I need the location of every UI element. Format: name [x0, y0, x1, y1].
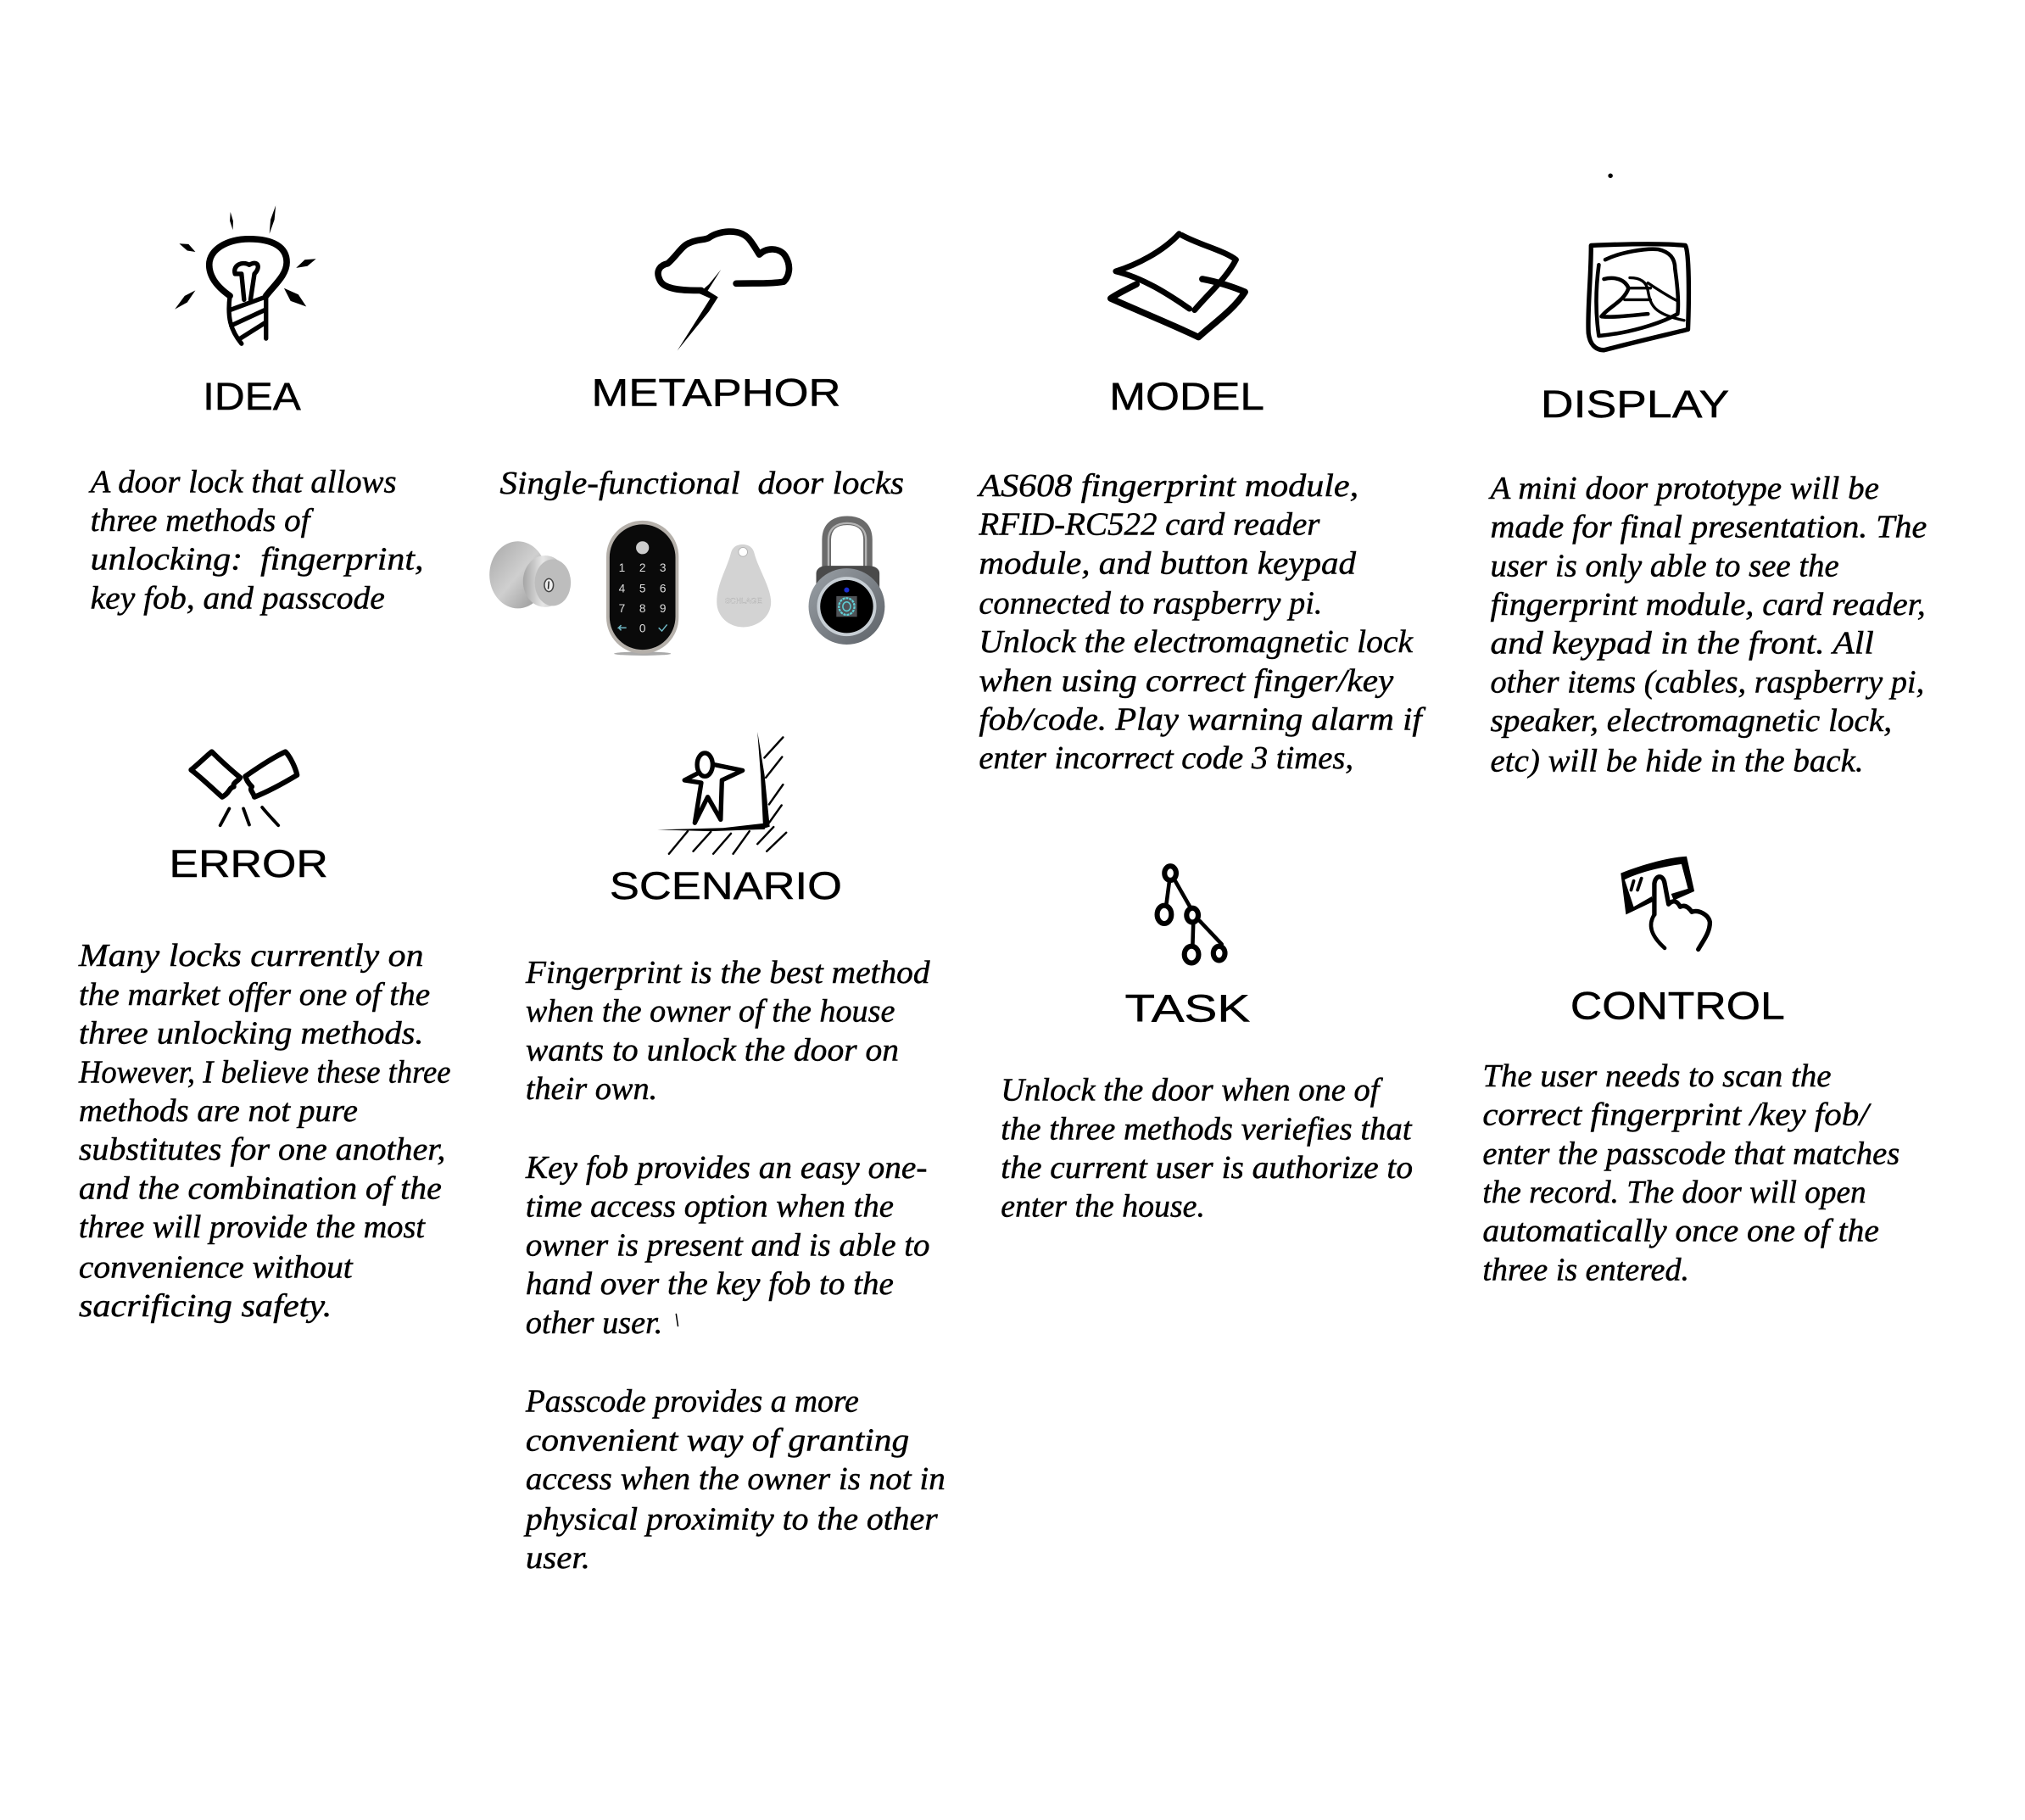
- text block: task: [1001, 1073, 1413, 1225]
- text block: display: A mini door prototype will be: [1487, 471, 1879, 506]
- text block: scenario: user.: [526, 1540, 590, 1576]
- photo: keypad lock: 5: [639, 582, 646, 595]
- text block: error: three unlocking methods.: [79, 1016, 424, 1052]
- photo: key fob: [717, 544, 771, 627]
- photo: keypad lock: 8: [639, 602, 646, 615]
- text block: scenario: convenient way of granting: [526, 1422, 909, 1458]
- icon: overlapping planes: [1111, 234, 1245, 338]
- photo: key fob: SCHLAGE: [725, 596, 762, 605]
- photo: keypad lock: 1: [619, 561, 625, 574]
- text block: display: other items (cables, raspberry pi,: [1490, 664, 1924, 700]
- text block: model: fob/code. Play warning alarm if: [979, 702, 1426, 738]
- text block: scenario: access when the owner is not in: [526, 1461, 946, 1497]
- text block: model: Unlock the electromagnetic lock: [979, 624, 1414, 660]
- text block: idea: unlocking: fingerprint,: [91, 542, 424, 578]
- icon: person by wall: [657, 732, 786, 854]
- heading: task: TASK: [1124, 987, 1250, 1030]
- text block: display: fingerprint module, card reader,: [1490, 587, 1926, 622]
- heading: scenario: SCENARIO: [610, 864, 842, 907]
- icon: task tree: [1158, 866, 1225, 963]
- text block: control: correct fingerprint /key fob/: [1482, 1097, 1872, 1133]
- text block: error: Many locks currently on: [78, 938, 424, 974]
- text block: display: and keypad in the front. All: [1490, 626, 1874, 662]
- text block: error: However, I believe these three: [78, 1054, 451, 1090]
- text block: error: sacrificing safety.: [79, 1288, 332, 1324]
- text block: scenario: physical proximity to the other: [523, 1501, 938, 1537]
- text block: task: the three methods veriefies that: [1001, 1111, 1413, 1147]
- caption: single-functional door locks: Single-functional door locks: [499, 466, 904, 501]
- text block: error: and the combination of the: [79, 1170, 442, 1206]
- text block: task: enter the house.: [1001, 1189, 1205, 1225]
- text block: scenario: their own.: [526, 1071, 657, 1107]
- heading: model: MODEL: [1109, 375, 1264, 418]
- text block: error: three will provide the most: [79, 1209, 426, 1245]
- text block: scenario: wants to unlock the door on: [526, 1032, 899, 1068]
- text block: scenario: other user.: [526, 1305, 662, 1341]
- photo: fingerprint padlock: [809, 521, 884, 645]
- text block: idea: [88, 464, 424, 616]
- text block: error: methods are not pure: [79, 1093, 358, 1129]
- panel: metaphor: [489, 232, 904, 656]
- text block: display: etc) will be hide in the back.: [1490, 743, 1864, 779]
- heading: idea: IDEA: [203, 375, 301, 418]
- text block: control: three is entered.: [1482, 1252, 1689, 1287]
- text block: scenario: Key fob provides an easy one-: [525, 1150, 927, 1186]
- text block: scenario: owner is present and is able to: [526, 1227, 930, 1263]
- text block: idea: key fob, and passcode: [91, 580, 385, 616]
- text block: scenario: hand over the key fob to the: [526, 1266, 894, 1302]
- icon: finger pressing panel: [1621, 857, 1710, 949]
- text block: display: [1487, 471, 1927, 779]
- panel: display: [1487, 173, 1927, 779]
- stray dot: [1608, 173, 1613, 178]
- photos: door lock products: [489, 521, 884, 656]
- text block: control: [1482, 1058, 1899, 1287]
- heading: metaphor: METAPHOR: [592, 371, 840, 414]
- panel: idea: [88, 205, 424, 616]
- photo: keypad lock: 3: [660, 561, 667, 574]
- text block: control: The user needs to scan the: [1482, 1058, 1832, 1094]
- icon: broken pieces: [191, 751, 297, 825]
- heading: display: DISPLAY: [1541, 382, 1729, 426]
- text block: error: substitutes for one another,: [79, 1132, 445, 1168]
- stray mark: [676, 1314, 678, 1326]
- text block: model: connected to raspberry pi.: [979, 585, 1323, 621]
- text block: scenario: Fingerprint is the best method: [525, 955, 931, 991]
- icon: storm cloud: [658, 232, 789, 351]
- text block: scenario: when the owner of the house: [526, 994, 895, 1030]
- panel: scenario: [523, 732, 946, 1576]
- text block: scenario: time access option when the: [526, 1189, 894, 1225]
- icon: sketched screen: [1588, 244, 1688, 350]
- text block: scenario: Passcode provides a more: [525, 1384, 859, 1420]
- text block: task: the current user is authorize to: [1001, 1150, 1413, 1186]
- text block: idea: A door lock that allows: [88, 464, 397, 500]
- text block: task: Unlock the door when one of: [1001, 1073, 1383, 1108]
- text block: error: [78, 938, 451, 1324]
- text block: control: automatically once one of the: [1482, 1214, 1879, 1249]
- text block: error: convenience without: [79, 1249, 354, 1285]
- text block: model: enter incorrect code 3 times,: [979, 740, 1353, 776]
- photo: keypad lock: 2: [639, 561, 645, 574]
- photo: keypad lock: 6: [660, 582, 667, 595]
- text block: model: module, and button keypad: [979, 545, 1357, 581]
- text block: display: made for final presentation. The: [1490, 510, 1927, 545]
- text block: display: user is only able to see the: [1490, 548, 1839, 583]
- text block: model: AS608 fingerprint module,: [976, 468, 1358, 504]
- text block: model: when using correct finger/key: [979, 663, 1393, 699]
- photo: keypad lock: [606, 521, 678, 656]
- photo: door knob: [489, 541, 571, 608]
- panel: model: [976, 234, 1426, 776]
- text block: scenario: [523, 955, 946, 1576]
- text block: error: the market offer one of the: [79, 977, 430, 1013]
- panel: control: [1482, 857, 1899, 1287]
- icon: light bulb: [175, 205, 316, 343]
- photo: keypad lock: 7: [619, 602, 625, 615]
- panel: task: [1001, 866, 1413, 1225]
- panel: error: [78, 751, 451, 1324]
- text block: control: the record. The door will open: [1482, 1175, 1866, 1210]
- text block: display: speaker, electromagnetic lock,: [1490, 703, 1892, 739]
- photo: keypad lock: 9: [660, 602, 667, 615]
- text block: model: RFID-RC522 card reader: [978, 507, 1320, 543]
- text block: model: [976, 468, 1426, 776]
- heading: control: CONTROL: [1570, 985, 1785, 1028]
- photo: keypad lock: 4: [619, 582, 626, 595]
- photo: keypad lock: 0: [639, 622, 646, 635]
- heading: error: ERROR: [170, 842, 328, 885]
- text block: idea: three methods of: [91, 503, 314, 539]
- text block: control: enter the passcode that matches: [1482, 1136, 1899, 1171]
